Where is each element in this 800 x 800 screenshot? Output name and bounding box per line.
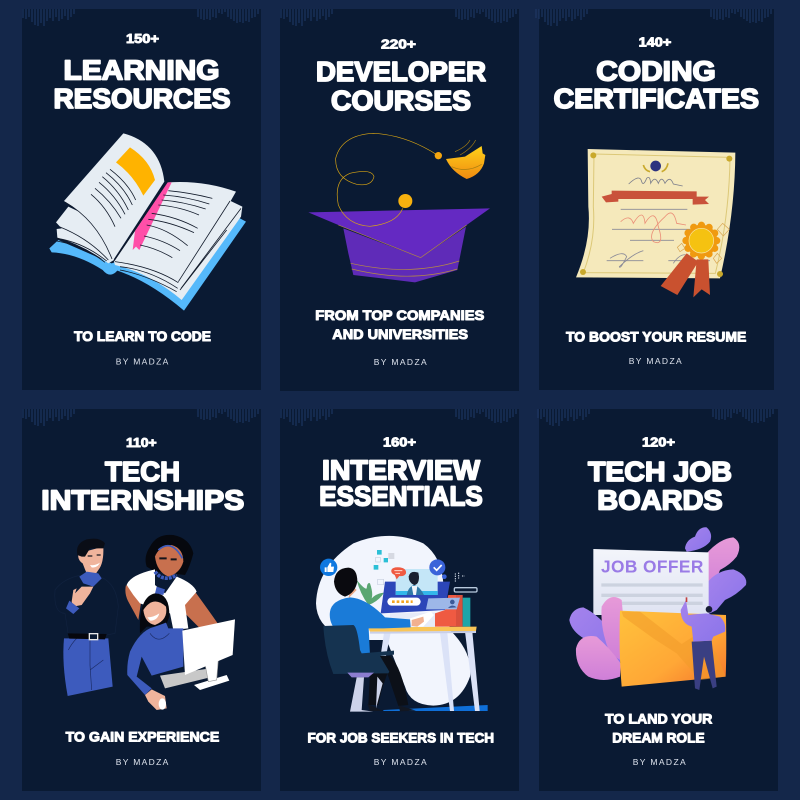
tagline [315,307,484,342]
tagline: AND UNIVERSITIES [332,326,468,342]
heading: tech internships: INTERNSHIPS [41,484,244,515]
man [55,539,118,696]
tagline: TO GAIN EXPERIENCE [66,729,219,745]
heading: learning resources: LEARNING [64,55,220,86]
tagline: TO BOOST YOUR RESUME [566,328,746,344]
icon: certificate [576,149,735,297]
heading: tech job boards [588,456,732,516]
tagline: DREAM ROLE [612,729,705,745]
panel: learning resources [22,9,261,390]
panel: coding certificates [536,9,774,390]
heading: interview essentials: INTERVIEW [322,454,480,485]
heading: developer courses: DEVELOPER [316,56,486,87]
tagline [605,710,712,745]
heading: interview essentials: ESSENTIALS [319,480,483,511]
count: 150+: 150+ [126,32,159,46]
byline: BY MADZA [374,357,427,367]
count: 110+: 110+ [126,436,157,450]
tagline: TO LAND YOUR [605,710,712,726]
heading: tech internships [41,456,244,515]
icon: job offer envelope [569,527,746,690]
icon: open book [49,133,246,311]
count: 220+: 220+ [381,38,416,52]
heading: developer courses: COURSES [331,85,471,116]
byline: BY MADZA [374,757,427,767]
heading: tech job boards: BOARDS [597,485,723,516]
panel: tech job boards [538,409,778,791]
heading: interview essentials [319,454,483,511]
count: 140+: 140+ [639,35,671,49]
heading: learning resources [54,55,230,114]
heading: developer courses [316,56,486,116]
tagline: FOR JOB SEEKERS IN TECH [308,729,494,745]
panel: developer courses [280,9,519,391]
byline: BY MADZA [116,356,169,366]
icon: graduation cap [308,133,490,282]
heading: tech internships: TECH [105,456,180,487]
icon: three people at a computer [55,535,235,710]
offer title: JOB OFFER [601,556,704,576]
heading: coding certificates [554,55,759,114]
heading: learning resources: RESOURCES [54,83,230,114]
heading: tech job boards: TECH JOB [588,456,732,487]
count: 160+: 160+ [383,435,416,449]
tagline: TO LEARN TO CODE [74,328,211,344]
panel: tech internships [22,409,261,791]
heading: coding certificates: CODING [596,55,716,86]
woman [125,535,218,630]
heading: coding certificates: CERTIFICATES [554,83,759,114]
tagline: FROM TOP COMPANIES [315,307,484,323]
count: 120+: 120+ [642,436,675,450]
byline: BY MADZA [116,757,169,767]
byline: BY MADZA [629,356,682,366]
icon: video interview [316,536,488,712]
byline: BY MADZA [633,757,686,767]
seated woman [127,593,183,710]
computer [160,619,235,690]
panel: interview essentials [280,409,519,791]
